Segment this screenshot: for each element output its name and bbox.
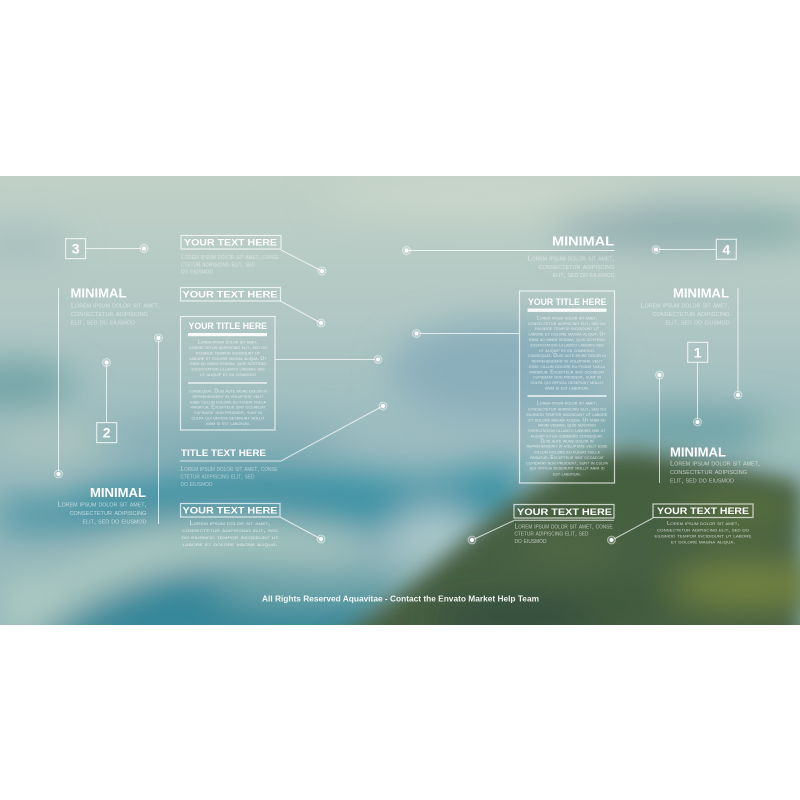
- block: minimal 1 with vertical pointer: MINIMAL: [670, 445, 726, 460]
- panel: right title box: enim ad minim veniam, quis nostrud: [529, 337, 605, 343]
- callout 4: numbered box and pointer: [652, 239, 736, 259]
- left callout: title text here: TITLE TEXT HERE: [181, 448, 266, 459]
- panel: right title box: esse cillum dolore eu fugiat nulla: [529, 364, 605, 370]
- right callout: your text here, underlined box with paragraph: do eiusmod: [514, 538, 547, 545]
- panel: right title box: qui officia deserunt mollit anim id: [530, 466, 605, 472]
- block: minimal 2 with vertical pointer: consectetur adipiscing: [70, 510, 147, 517]
- panel: right title box: labore et dolore magna aliqua. Ut: [528, 332, 606, 338]
- callout 3: numbered box and pointer: 3: [72, 241, 80, 257]
- left callout: title text here: Lorem ipsum dolor sit amet, conse: [180, 466, 278, 473]
- panel: right title box: reprehenderit in voluptate velit esse: [526, 444, 608, 450]
- panel: right title box: Lorem ipsum dolor sit amet,: [537, 315, 597, 321]
- panel: right title box: [412, 291, 614, 483]
- right callout: your text here, centered paragraph: Lorem ipsum dolor sit amet,: [667, 521, 739, 527]
- left callout: your text here, centered paragraph: do eiusmod tempor incididunt ut: [182, 534, 279, 541]
- block: minimal 2 with vertical pointer: elit, sed do eiusmod: [82, 518, 147, 526]
- left callout: your text here, boxed with paragraph: do eiusmod: [181, 268, 213, 276]
- left callout: your text here, boxed with paragraph: YOUR TEXT HERE: [184, 238, 277, 248]
- left callout: your text here, centered paragraph: YOUR TEXT HERE: [182, 506, 278, 517]
- panel: right title box: ut aliquip ex ea commodo.: [539, 348, 595, 354]
- center callout: minimal with long underline: Lorem ipsum dolor sit amet,: [528, 256, 615, 263]
- block: minimal 1 with vertical pointer: [656, 371, 760, 484]
- panel: left title box: Lorem ipsum dolor sit amet,: [198, 340, 258, 346]
- panel: left title box: labore et dolore magna aliqua. Ut: [190, 356, 267, 362]
- panel: right title box: minim veniam, quis nostrud: [538, 423, 596, 429]
- block: minimal 4 with vertical pointer: MINIMAL: [673, 286, 729, 300]
- panel: left title box: [180, 316, 382, 430]
- panel: right title box: pariatur. Excepteur sint occaecat: [530, 455, 604, 461]
- panel: right title box: eiusmod tempor incididunt ut labore: [526, 412, 608, 418]
- center callout: minimal with long underline: consectetur adipiscing: [538, 264, 615, 271]
- panel: right title box: cupidatat non proident, sunt in: [533, 375, 601, 381]
- panel: right title box: Lorem ipsum dolor sit amet,: [537, 401, 597, 407]
- right callout: your text here, underlined box with paragraph: YOUR TEXT HERE: [517, 507, 612, 518]
- block: minimal 3 with vertical pointer: Lorem ipsum dolor sit amet,: [71, 302, 160, 310]
- right callout: your text here, centered paragraph: eiusmod tempor incididunt ut labore: [654, 534, 752, 540]
- block: minimal 3 with vertical pointer: consectetur adipiscing: [71, 311, 148, 318]
- block: minimal 3 with vertical pointer: elit, sed do eiusmod: [71, 320, 135, 326]
- panel: left title box: culpa qui officia deserunt mollit: [192, 415, 265, 421]
- left callout: title text here: ctetur adipiscing elit, sed: [180, 474, 255, 480]
- footer credit: All Rights Reserved Aquavitae - Contact the Envato Market Help Team: [262, 594, 539, 604]
- callout 1: numbered box and pointer: [688, 342, 708, 426]
- panel: left title box: enim ad minim veniam, quis nostrud: [190, 361, 266, 367]
- center callout: minimal with long underline: elit, sed do eiusmod: [552, 272, 615, 279]
- panel: left title box: reprehenderit in voluptate velit: [192, 394, 264, 400]
- left callout: your text here, centered paragraph: Lorem ipsum dolor sit amet,: [190, 520, 271, 527]
- blurred photo background: [0, 176, 800, 660]
- left callout: your text here, boxed with paragraph: ctetur adipiscing elit, sed: [181, 262, 255, 268]
- panel: left title box: consectetur adipiscing elit, sed do: [189, 345, 267, 351]
- right callout: your text here, centered paragraph: YOUR TEXT HERE: [657, 506, 749, 517]
- left callout: your text here, boxed with paragraph: [181, 236, 326, 276]
- panel: left title box: YOUR TITLE HERE: [188, 321, 267, 332]
- left callout: your text here, boxed heading: YOUR TEXT HERE: [182, 290, 278, 301]
- block: minimal 2 with vertical pointer: [58, 334, 162, 526]
- panel: right title box: eiusmod tempor incididunt ut: [535, 326, 600, 332]
- block: minimal 4 with vertical pointer: elit, sed do eiusmod: [666, 320, 730, 326]
- panel: left title box: eiusmod tempor incididunt ut: [196, 351, 261, 357]
- block: minimal 1 with vertical pointer: consectetur adipiscing: [670, 469, 747, 476]
- callout 3: numbered box and pointer: [66, 239, 148, 259]
- panel: right title box: Duis aute irure dolor in: [540, 439, 594, 445]
- right callout: your text here, underlined box with paragraph: Lorem ipsum dolor sit amet, conse: [514, 524, 613, 530]
- panel: right title box: anim id est laborum.: [545, 386, 589, 392]
- panel: right title box: consectetur adipiscing elit, sed do: [528, 321, 606, 327]
- center callout: minimal with long underline: [402, 234, 615, 279]
- right callout: your text here, underlined box with paragraph: ctetur adipiscing elit, sed: [514, 530, 589, 538]
- panel: left title box: esse cillum dolore eu fugiat nulla: [190, 399, 266, 405]
- panel: right title box: culpa qui officia deserunt mollit: [530, 380, 604, 386]
- panel: right title box: exercitation ullamco laboris nisi ut: [528, 428, 606, 434]
- callout 4: numbered box and pointer: 4: [722, 241, 730, 257]
- center callout: minimal with long underline: MINIMAL: [552, 234, 614, 248]
- block: minimal 2 with vertical pointer: Lorem ipsum dolor sit amet,: [58, 502, 147, 508]
- right callout: your text here, centered paragraph: [608, 504, 753, 546]
- panel: left title box: anim id est laborum.: [206, 421, 250, 427]
- callout 2: numbered box and pointer: [97, 358, 117, 443]
- panel: left title box: pariatur. Excepteur sint occaecat: [190, 405, 266, 411]
- left callout: your text here, centered paragraph: consectetur adipiscing elit, sed: [182, 527, 278, 534]
- block: minimal 3 with vertical pointer: [54, 286, 160, 478]
- right callout: your text here, centered paragraph: et dolore magna aliqua.: [671, 540, 735, 546]
- left callout: title text here: [180, 402, 387, 488]
- left callout: your text here, boxed with paragraph: Lorem ipsum dolor sit amet, conse: [181, 254, 280, 261]
- block: minimal 4 with vertical pointer: consectetur adipiscing: [652, 311, 730, 318]
- panel: right title box: reprehenderit in voluptate velit: [532, 358, 603, 364]
- panel: left title box: cupidatat non proident, sunt in: [194, 410, 262, 416]
- panel: left title box: consequat. Duis aute irure dolor in: [189, 389, 267, 395]
- panel: right title box: YOUR TITLE HERE: [528, 297, 606, 308]
- panel: right title box: cupidatat non proident, sunt in culpa: [526, 460, 608, 466]
- callout 2: numbered box and pointer: 2: [103, 425, 111, 441]
- block: minimal 4 with vertical pointer: [640, 286, 742, 399]
- panel: right title box: et dolore magna aliqua. Ut enim ad: [528, 417, 606, 423]
- block: minimal 4 with vertical pointer: Lorem ipsum dolor sit amet,: [640, 302, 730, 310]
- panel: right title box: est laborum.: [553, 471, 581, 477]
- block: minimal 1 with vertical pointer: elit, sed do eiusmod: [670, 478, 734, 484]
- panel: right title box: consequat. Duis aute irure dolor in: [528, 353, 606, 359]
- panel: right title box: pariatur. Excepteur sint occaecat: [530, 369, 605, 375]
- block: minimal 2 with vertical pointer: MINIMAL: [90, 485, 146, 500]
- right callout: your text here, centered paragraph: consectetur adipiscing elit, sed do: [657, 528, 749, 534]
- right callout: your text here, underlined box with paragraph: [468, 504, 614, 545]
- panel: left title box: exercitation ullamco laboris nisi: [192, 367, 264, 373]
- callout 1: numbered box and pointer: 1: [694, 344, 702, 360]
- block: minimal 1 with vertical pointer: Lorem ipsum dolor sit amet,: [670, 461, 760, 468]
- left callout: title text here: do eiusmod: [180, 481, 213, 488]
- panel: left title box: ut aliquip ex ea commodo: [200, 372, 256, 378]
- left callout: your text here, centered paragraph: [180, 504, 325, 548]
- left callout: your text here, centered paragraph: labore et dolore magna aliqua.: [182, 541, 278, 548]
- left callout: your text here, boxed heading: [180, 288, 325, 327]
- block: minimal 3 with vertical pointer: MINIMAL: [70, 286, 127, 300]
- panel: right title box: aliquip ex ea commodo consequat.: [530, 434, 604, 440]
- panel: right title box: exercitation ullamco laboris nisi: [530, 342, 604, 348]
- panel: right title box: cillum dolore eu fugiat nulla: [534, 450, 600, 456]
- panel: right title box: consectetur adipiscing elit, sed do: [528, 406, 606, 412]
